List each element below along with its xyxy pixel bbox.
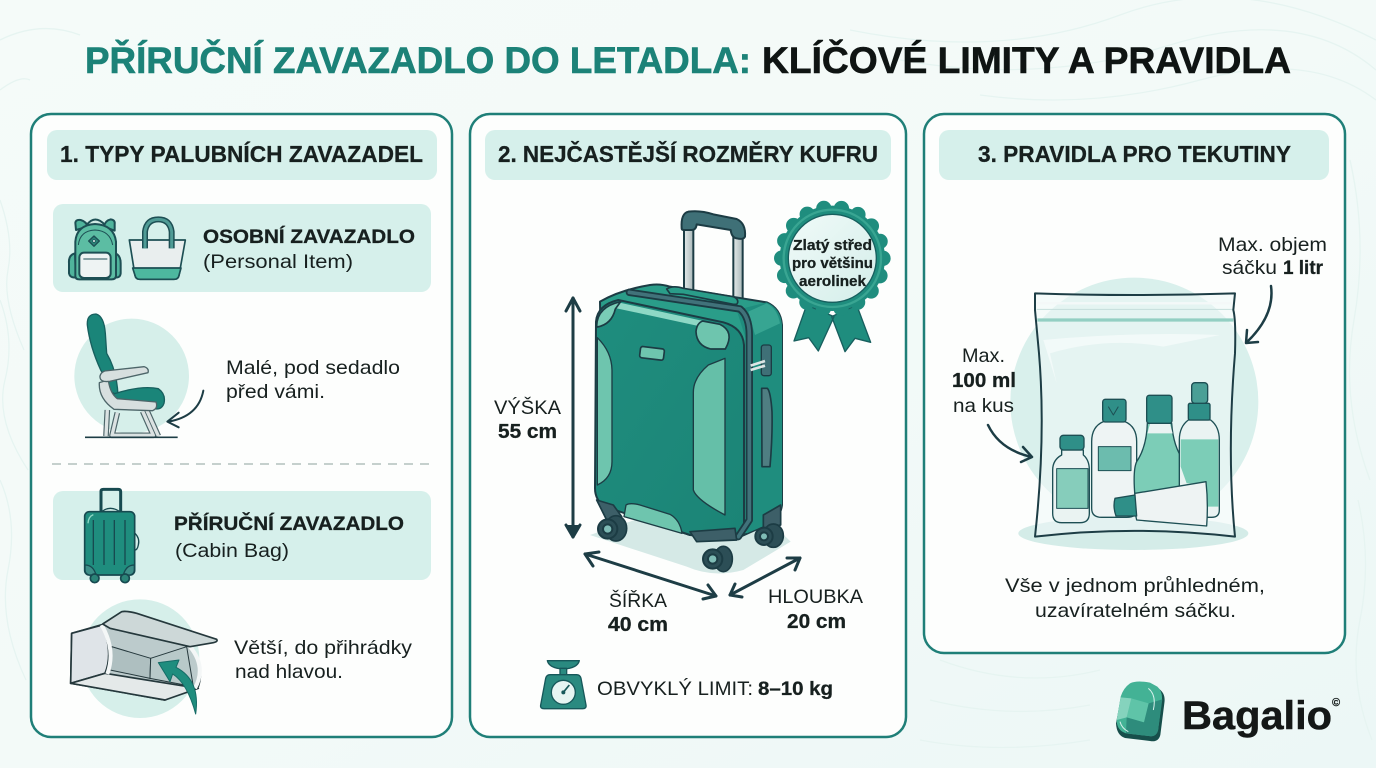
text: bag caption: uzavíratelném sáčku. <box>1035 600 1236 622</box>
text: under the seat: Malé, pod sedadlo <box>226 357 400 379</box>
heading: types of baggage: 1. TYPY PALUBNÍCH ZAVAZADEL <box>60 140 423 167</box>
illustration: clear bag with bottles <box>1010 278 1258 550</box>
badge: golden mean: aerolinek <box>799 273 867 290</box>
label: per item: 100 ml <box>952 370 1016 392</box>
cabin bag banner: (Cabin Bag) <box>175 541 289 562</box>
label: bag volume: Max. objem <box>1218 234 1327 256</box>
text: weight limit <box>597 677 833 700</box>
heading: liquids <box>939 130 1329 180</box>
label: per item: Max. <box>962 345 1005 367</box>
heading: types of baggage <box>47 130 437 180</box>
icon: overhead bin with arrow <box>71 599 217 718</box>
icon: logo gem <box>1116 681 1165 741</box>
text: under the seat <box>226 357 400 403</box>
label: height: VÝŠKA <box>494 396 561 419</box>
icon: backpack and tote bag <box>69 219 185 279</box>
badge: golden mean: Zlatý střed <box>793 237 872 254</box>
label: bag volume: sáčku <box>1222 257 1277 279</box>
label: bag volume: 1 litr <box>1283 257 1323 279</box>
illustration: green suitcase <box>590 211 791 573</box>
icon: airplane seat with arrow <box>74 314 203 437</box>
icon: cabin suitcase <box>85 489 139 583</box>
logo: Bagalio: © <box>1332 697 1340 709</box>
arrow: bag volume <box>1246 286 1272 343</box>
arrow: width <box>585 552 716 599</box>
text: bag caption <box>1005 575 1265 622</box>
title: KLÍČOVÉ LIMITY A PRAVIDLA <box>762 39 1291 81</box>
tube <box>1114 482 1207 526</box>
panel: types of cabin baggage <box>31 114 452 737</box>
arrow: per item <box>988 425 1032 462</box>
text: under the seat: před vámi. <box>226 381 325 403</box>
heading: dimensions <box>485 130 891 180</box>
text: overhead compartment: Větší, do přihrádky <box>234 637 412 659</box>
badge: golden mean <box>780 206 885 352</box>
label: per item <box>952 345 1016 417</box>
personal item banner <box>53 204 431 292</box>
label: bag volume <box>1218 234 1327 279</box>
label: height <box>494 396 561 443</box>
cabin bag banner <box>53 491 431 580</box>
text: overhead compartment: nad hlavou. <box>235 661 343 683</box>
logo: Bagalio <box>1116 681 1340 741</box>
bottle: spray <box>1179 383 1219 517</box>
cabin bag banner: PŘÍRUČNÍ ZAVAZADLO <box>174 511 404 535</box>
label: depth: HLOUBKA <box>768 586 863 608</box>
bottle: small <box>1053 435 1089 523</box>
label: width <box>608 589 668 636</box>
label: depth <box>768 586 863 633</box>
label: per item: na kus <box>953 395 1014 417</box>
label: height: 55 cm <box>498 421 557 443</box>
label: depth: 20 cm <box>787 611 846 633</box>
title <box>85 39 1291 81</box>
heading: liquids: 3. PRAVIDLA PRO TEKUTINY <box>978 141 1291 167</box>
label: width: 40 cm <box>608 614 668 636</box>
arrow: depth <box>730 558 800 597</box>
bottle: label <box>1092 399 1137 517</box>
icon: scale <box>541 661 586 709</box>
personal item banner: OSOBNÍ ZAVAZADLO <box>203 225 415 248</box>
heading: dimensions: 2. NEJČASTĚJŠÍ ROZMĚRY KUFRU <box>498 140 878 167</box>
title: PŘÍRUČNÍ ZAVAZADLO DO LETADLA: <box>85 39 751 81</box>
panel: liquids rules <box>924 114 1345 653</box>
text: overhead compartment <box>234 637 412 683</box>
bottle: green <box>1134 395 1187 497</box>
label: width: ŠÍŘKA <box>609 589 667 612</box>
text: bag caption: Vše v jednom průhledném, <box>1005 575 1265 597</box>
panel: suitcase dimensions <box>470 114 906 737</box>
arrow: height <box>566 298 580 537</box>
text: weight limit: 8–10 kg <box>758 678 833 700</box>
logo: Bagalio: Bagalio <box>1182 694 1332 738</box>
personal item banner: (Personal Item) <box>203 252 353 273</box>
badge: golden mean: pro většinu <box>792 255 873 272</box>
text: weight limit: OBVYKLÝ LIMIT: <box>597 677 753 700</box>
